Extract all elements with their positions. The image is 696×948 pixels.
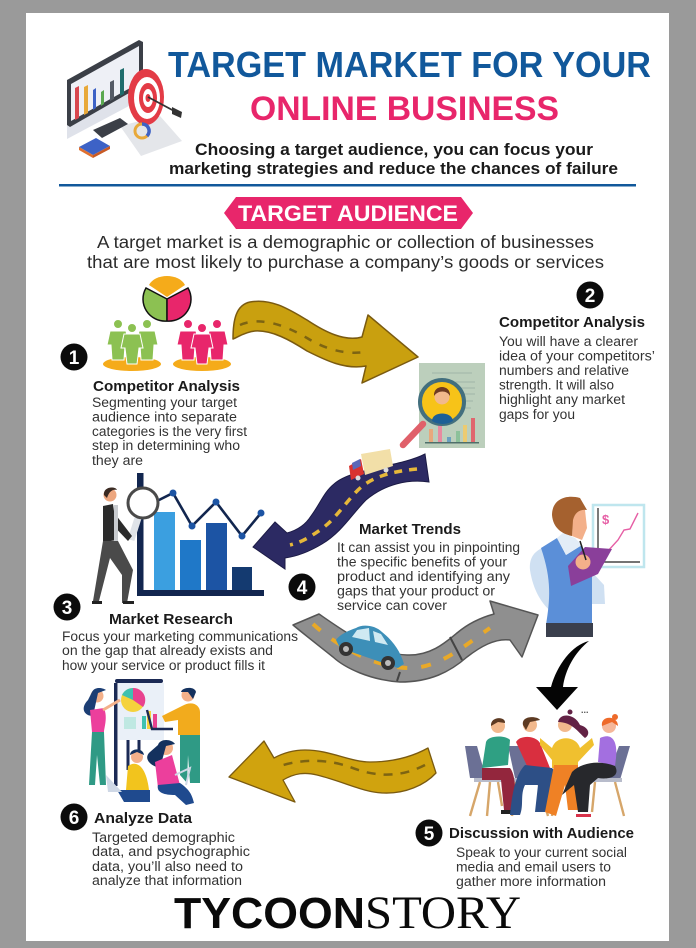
body text: Focus your marketing communications [62, 629, 298, 644]
number badge 1: 1 [69, 348, 80, 369]
body text: audience into separate [92, 410, 237, 424]
heading: competitor analysis: Competitor Analysis [499, 314, 645, 331]
subtitle [169, 141, 618, 178]
panel: step 2 competitor analysis [403, 282, 655, 448]
panel: step 4 market trends [288, 521, 520, 613]
body text [499, 334, 655, 422]
section banner: target audience: TARGET AUDIENCE [238, 201, 458, 226]
intro text [87, 232, 604, 272]
heading: analyze data: Analyze Data [94, 810, 193, 827]
body text: It can assist you in pinpointing [337, 540, 520, 555]
icon: four people in chairs [465, 705, 630, 817]
bar chart [137, 473, 264, 596]
body text: how your service or product fills it [62, 658, 265, 673]
panel: step 3 market research [54, 473, 298, 673]
icon: report with magnifier [403, 363, 485, 448]
body text: service can cover [337, 598, 448, 613]
body text: on the gap that already exists and [62, 643, 273, 658]
title [168, 44, 651, 128]
arrow: step 2 to step 3, dark road with truck [253, 449, 429, 569]
heading: market trends: Market Trends [359, 521, 461, 538]
icon: monitor with target [67, 40, 182, 158]
number badge 6: 6 [69, 808, 79, 829]
panel: step 1 competitor analysis [60, 276, 247, 468]
arrow: black curved arrow down [536, 641, 589, 710]
section banner: target audience [224, 197, 473, 229]
icon: man with clipboard and chart [530, 497, 644, 637]
icon: truck [349, 449, 393, 480]
icon: person with magnifier [92, 487, 158, 604]
body text [62, 629, 298, 673]
body text: gaps for you [499, 407, 575, 422]
icon: team with presentation board [84, 679, 200, 805]
body text: You will have a clearer [499, 334, 639, 349]
arrow: step 4 to step 5, grey road with car [293, 601, 538, 682]
body text: they are [92, 453, 143, 468]
number badge 2: 2 [585, 286, 595, 307]
intro text: that are most likely to purchase a company’s goods or services [87, 252, 604, 272]
icon: man with clipboard and chart: $ [602, 512, 610, 527]
icon: four people in chairs: ... [581, 705, 589, 715]
body text: step in determining who [92, 438, 240, 453]
body text: analyze that information [92, 873, 242, 888]
body text [92, 830, 250, 888]
logo: tycoonstory: TYCOON [174, 889, 365, 938]
subtitle: Choosing a target audience, you can focus your [195, 141, 594, 159]
heading: competitor analysis: Competitor Analysis [93, 378, 240, 395]
number badge 4: 4 [297, 578, 308, 599]
arrow: step 1 to step 2 [233, 301, 418, 383]
panel: step 5 discussion with audience [416, 705, 634, 889]
body text: idea of your competitors’ [499, 348, 655, 364]
body text [337, 540, 520, 613]
number badge 6 [60, 804, 88, 830]
panel: step 6 analyze data [60, 679, 250, 888]
number badge 1 [60, 344, 88, 370]
body text: Speak to your current social [456, 845, 627, 860]
body text: strength. It will also [499, 378, 614, 392]
title: TARGET MARKET FOR YOUR [168, 44, 651, 85]
body text: product and identifying any [337, 569, 510, 584]
body text [92, 395, 247, 468]
body text: the specific benefits of your [337, 554, 508, 570]
title: ONLINE BUSINESS [250, 90, 559, 128]
body text: highlight any market [499, 392, 625, 407]
number badge 4 [288, 574, 316, 600]
number badge 3: 3 [62, 598, 72, 619]
intro text: A target market is a demographic or collection of businesses [97, 232, 594, 252]
header [67, 40, 651, 178]
number badge 5: 5 [424, 824, 435, 845]
body text [456, 845, 627, 889]
logo: tycoonstory [174, 887, 521, 939]
body text: Segmenting your target [92, 395, 237, 410]
body text: numbers and relative [499, 363, 629, 378]
body text: media and email users to [456, 860, 611, 874]
body text: data, and psychographic [92, 844, 250, 859]
number badge 2 [576, 282, 604, 308]
body text: gather more information [456, 874, 606, 889]
logo: tycoonstory: STORY [365, 887, 521, 939]
icon: car [336, 626, 404, 670]
body text: categories is the very first [92, 424, 247, 439]
body text: data, you’ll also need to [92, 859, 243, 874]
heading: market research: Market Research [109, 611, 233, 628]
arrow: step 5 to step 6 [229, 741, 436, 802]
number badge 3 [54, 594, 80, 620]
subtitle: marketing strategies and reduce the chances of failure [169, 160, 618, 178]
number badge 5 [416, 820, 442, 846]
body text: gaps that your product or [337, 584, 496, 598]
body text: Targeted demographic [92, 830, 235, 845]
icon: audience segments [103, 276, 231, 371]
heading: discussion with audience: Discussion with Audience [449, 825, 634, 842]
